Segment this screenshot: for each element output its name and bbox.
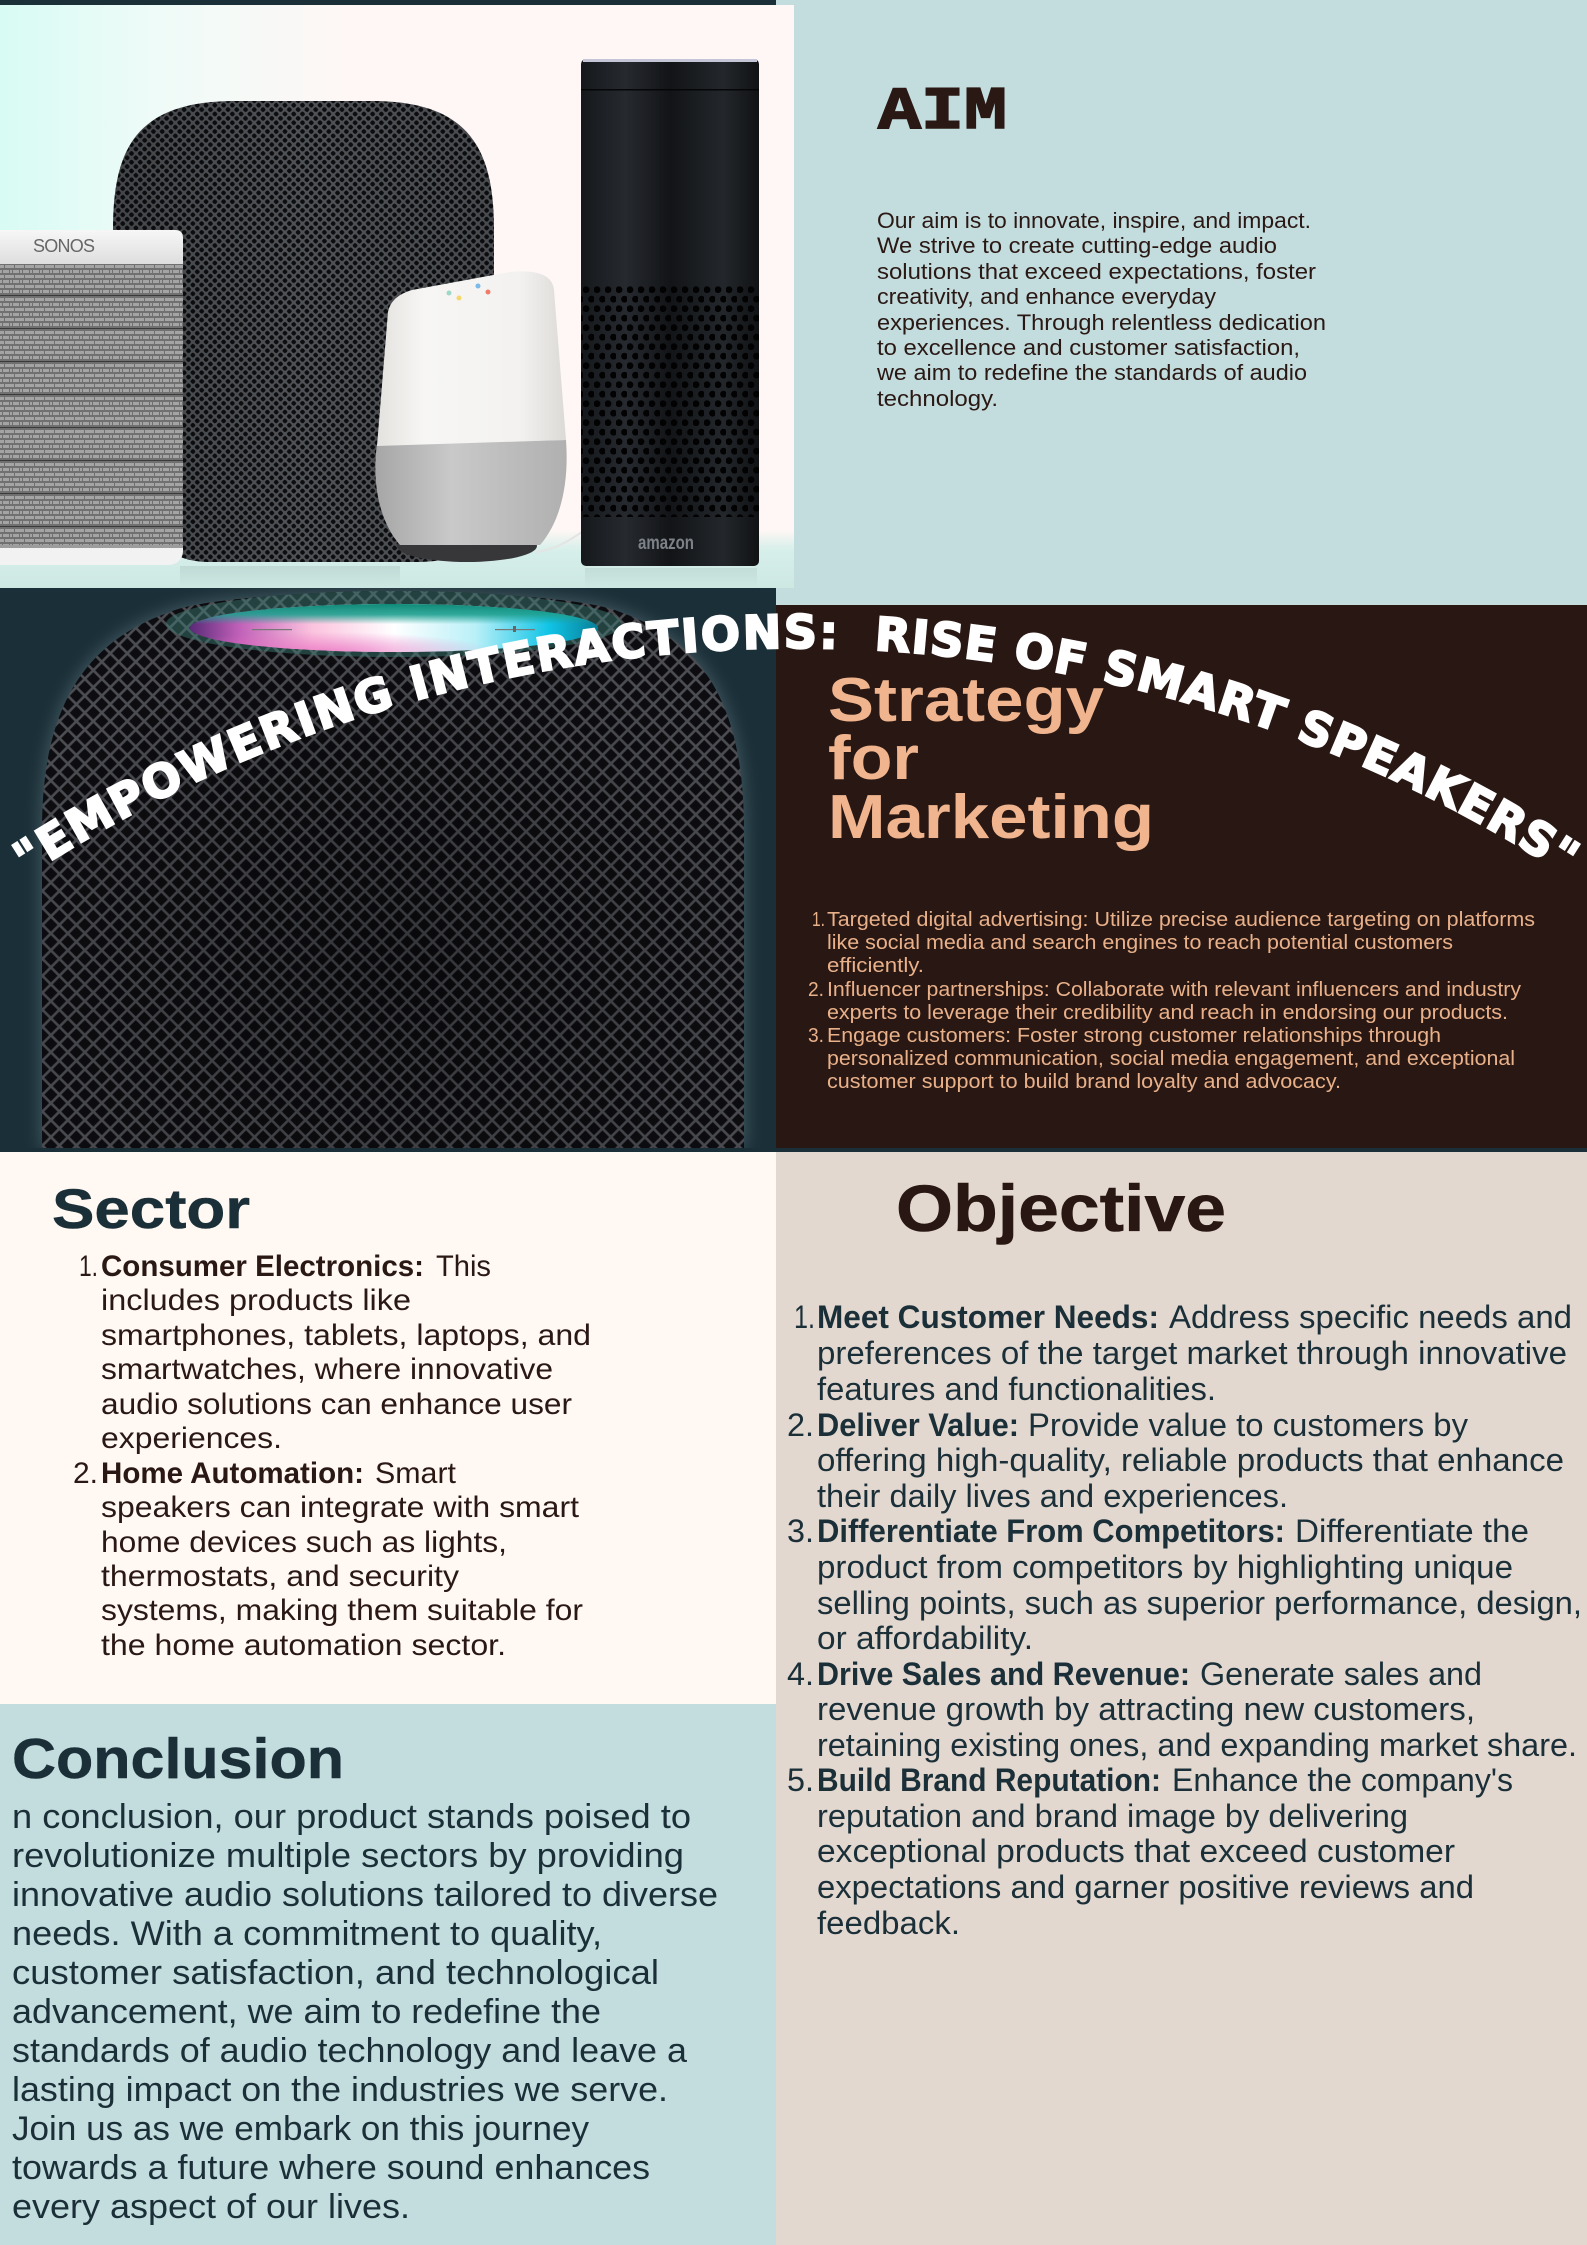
list: marketing strategies: experts to leverage their credibility and reach in endorsing our products. (827, 1002, 1508, 1024)
list: objectives: expectations and garner positive reviews and (817, 1869, 1474, 1905)
bottom divider strip (0, 1148, 1587, 1152)
list: marketing strategies: customer support to build brand loyalty and advocacy. (827, 1071, 1341, 1093)
heading: sector: Sector (52, 1177, 250, 1240)
sonos label: SONOS (33, 236, 95, 256)
list: marketing strategies: efficiently. (827, 955, 924, 977)
list: objectives: 5. (787, 1762, 814, 1798)
list: objectives: reputation and brand image by delivering (817, 1798, 1408, 1834)
list: sectors: systems, making them suitable for (101, 1594, 583, 1627)
list: objectives: feedback. (817, 1905, 960, 1941)
text block: aim body: solutions that exceed expectations, foster (877, 259, 1316, 284)
list: marketing strategies: Targeted digital advertising: Utilize precise audience targeting on platforms (827, 909, 1535, 931)
amazon label: amazon (638, 533, 694, 554)
list: marketing strategies: 1. (812, 909, 825, 931)
list: marketing strategies: Influencer partnerships: Collaborate with relevant influencers and industry (827, 979, 1521, 1001)
text block: conclusion body: advancement, we aim to redefine the (12, 1993, 601, 2031)
list: objectives: offering high-quality, reliable products that enhance (817, 1442, 1564, 1478)
text block: conclusion body: lasting impact on the industries we serve. (12, 2071, 668, 2109)
list: sectors: Smart (375, 1457, 457, 1490)
list: sectors: Home Automation: (101, 1457, 364, 1490)
heading: conclusion: Conclusion (12, 1727, 344, 1791)
list: objectives: preferences of the target market through innovative (817, 1335, 1567, 1371)
list: marketing strategies: Engage customers: Foster strong customer relationships through (827, 1025, 1441, 1047)
panel: conclusion (0, 1704, 776, 2245)
list: objectives: 2. (787, 1407, 814, 1443)
heading: strategy for marketing: for (828, 724, 919, 793)
text block: conclusion body: needs. With a commitment to quality, (12, 1915, 602, 1953)
list: objectives: 3. (787, 1513, 814, 1549)
list: sectors: smartphones, tablets, laptops, and (101, 1319, 591, 1352)
list: objectives: their daily lives and experiences. (817, 1478, 1288, 1514)
list: sectors: Consumer Electronics: (101, 1250, 424, 1283)
list: objectives: revenue growth by attracting new customers, (817, 1691, 1475, 1727)
siri light (190, 604, 598, 652)
list: objectives: Drive Sales and Revenue: (817, 1656, 1190, 1692)
text block: aim body: to excellence and customer satisfaction, (877, 335, 1300, 360)
text block: conclusion body: towards a future where sound enhances (12, 2149, 650, 2187)
list: marketing strategies: 3. (808, 1025, 824, 1047)
text block: conclusion body: innovative audio solutions tailored to diverse (12, 1876, 718, 1914)
list: marketing strategies: personalized communication, social media engagement, and exceptional (827, 1048, 1515, 1070)
icon: white fabric speaker (375, 271, 582, 562)
text block: aim body: technology. (877, 386, 998, 411)
list: objectives: Generate sales and (1200, 1656, 1482, 1692)
text block: conclusion body: revolutionize multiple sectors by providing (12, 1837, 684, 1875)
list: objectives: Address specific needs and (1169, 1299, 1572, 1335)
heading: strategy for marketing (828, 666, 1154, 852)
heading: aim: AIM (878, 79, 1007, 147)
icon: sonos speaker (0, 230, 183, 565)
text block: aim body: experiences. Through relentless dedication (877, 310, 1326, 335)
list: sectors: speakers can integrate with smart (101, 1491, 580, 1524)
icon: dark round speaker (113, 101, 494, 562)
list: objectives: retaining existing ones, and expanding market share. (817, 1727, 1577, 1763)
list: marketing strategies: like social media and search engines to reach potential customers (827, 932, 1453, 954)
panel: hero speaker (0, 588, 776, 1152)
text block: aim body: creativity, and enhance everyday (877, 284, 1216, 309)
list: sectors: smartwatches, where innovative (101, 1353, 553, 1386)
text block: conclusion body: customer satisfaction, and technological (12, 1954, 659, 1992)
list: objectives: Differentiate the (1295, 1513, 1529, 1549)
list: objectives: features and functionalities. (817, 1371, 1216, 1407)
list: objectives: exceptional products that exceed customer (817, 1833, 1455, 1869)
list: sectors: experiences. (101, 1422, 282, 1455)
text block: aim body (876, 208, 1326, 411)
list: sectors: 2. (73, 1457, 98, 1490)
heading: strategy for marketing: Marketing (828, 783, 1154, 852)
list: sectors: includes products like (101, 1284, 411, 1317)
list: sectors: 1. (79, 1250, 98, 1283)
text block: conclusion body (12, 1798, 718, 2226)
icon: large mesh speaker (42, 591, 744, 1148)
list: sectors: home devices such as lights, (101, 1526, 507, 1559)
photo: four smart speakers (0, 5, 794, 588)
list: objectives: product from competitors by highlighting unique (817, 1549, 1513, 1585)
icon: tall black speaker (581, 59, 759, 566)
text block: aim body: We strive to create cutting-edge audio (877, 233, 1277, 258)
list: objectives: Enhance the company's (1172, 1762, 1513, 1798)
panel: objective (776, 1152, 1587, 2245)
title: curved headline: "EMPOWERING INTERACTIONS: RISE OF SMART SPEAKERS" (11, 612, 1581, 862)
list: objectives: Build Brand Reputation: (817, 1762, 1161, 1798)
list: objectives: 4. (787, 1656, 814, 1692)
list: objectives (787, 1299, 1582, 1941)
list: marketing strategies (808, 909, 1535, 1093)
heading: objective: Objective (896, 1171, 1226, 1245)
text block: conclusion body: every aspect of our lives. (12, 2188, 410, 2226)
text block: conclusion body: Join us as we embark on this journey (12, 2110, 589, 2148)
list: objectives: selling points, such as superior performance, design, (817, 1585, 1582, 1621)
list: objectives: Differentiate From Competitors: (817, 1513, 1285, 1549)
list: sectors (73, 1250, 591, 1662)
list: objectives: Deliver Value: (817, 1407, 1019, 1443)
list: objectives: 1. (794, 1299, 815, 1335)
mesh ring (166, 591, 622, 657)
panel: sector (0, 1152, 776, 1704)
list: objectives: Provide value to customers by (1028, 1407, 1468, 1443)
list: objectives: Meet Customer Needs: (817, 1299, 1159, 1335)
list: objectives: or affordability. (817, 1620, 1033, 1656)
text block: aim body: we aim to redefine the standards of audio (876, 360, 1307, 385)
list: marketing strategies: 2. (808, 979, 824, 1001)
list: sectors: audio solutions can enhance user (101, 1388, 572, 1421)
list: sectors: This (436, 1250, 491, 1283)
list: sectors: the home automation sector. (101, 1629, 506, 1662)
list: sectors: thermostats, and security (101, 1560, 459, 1593)
text block: aim body: Our aim is to innovate, inspire, and impact. (877, 208, 1311, 233)
top strip (0, 0, 776, 5)
panel: marketing strategy (776, 605, 1587, 1148)
panel: aim (776, 0, 1587, 605)
text block: conclusion body: standards of audio technology and leave a (12, 2032, 687, 2070)
text block: conclusion body: n conclusion, our product stands poised to (12, 1798, 691, 1836)
heading: strategy for marketing: Strategy (828, 666, 1105, 735)
